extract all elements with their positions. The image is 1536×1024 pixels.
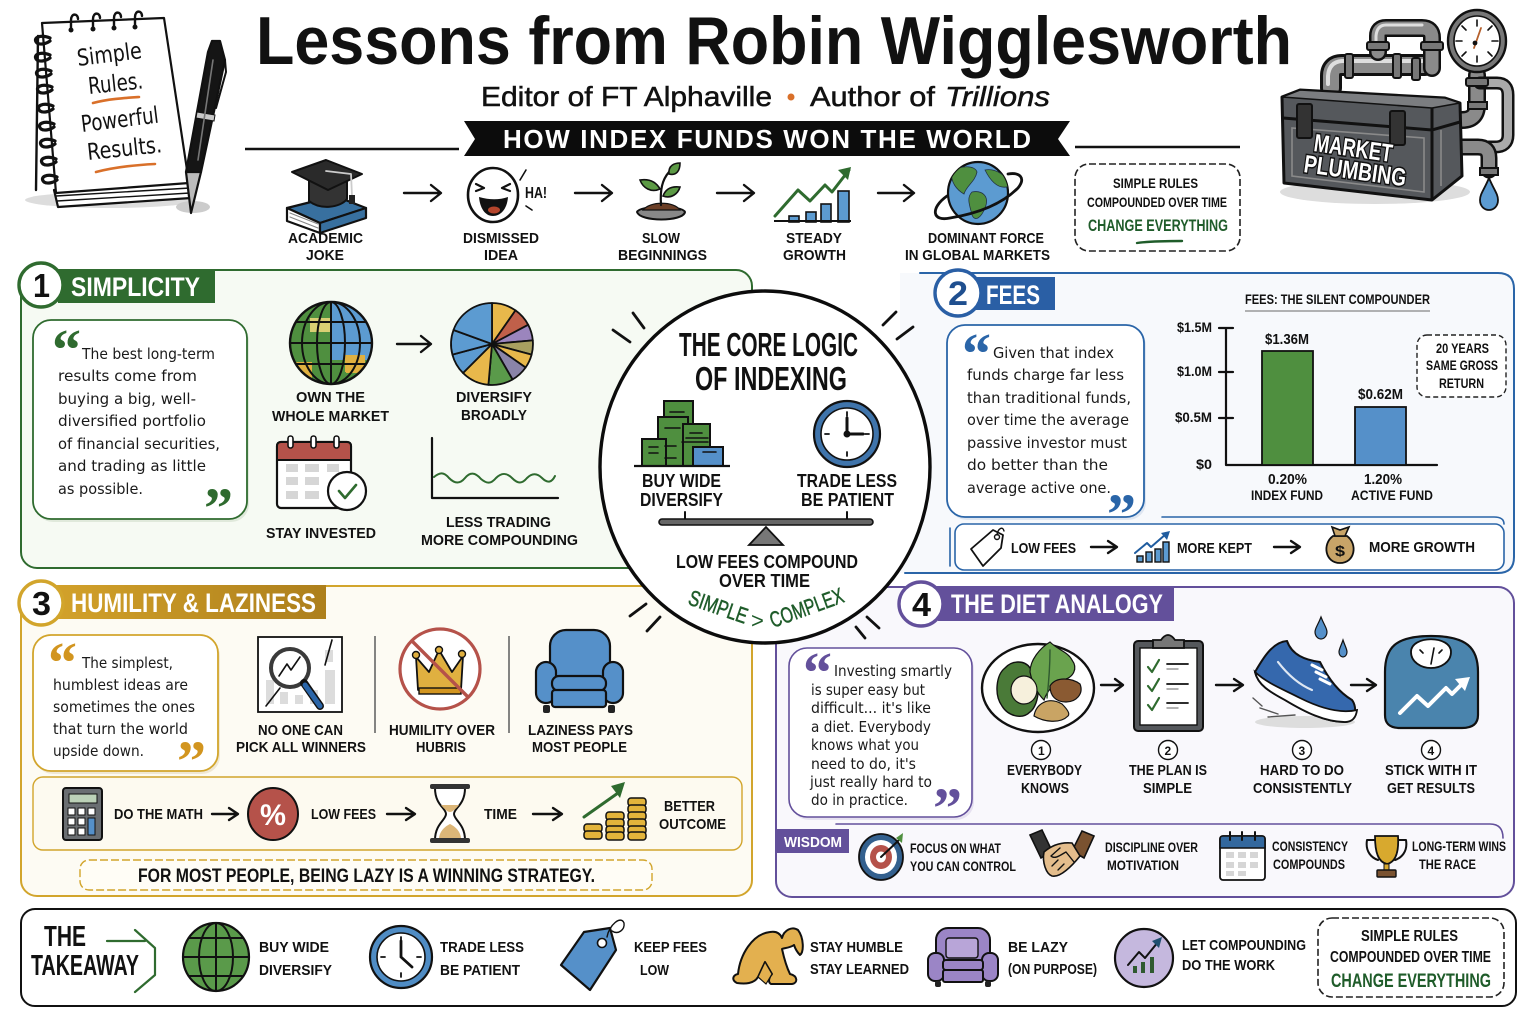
icon: magnifier over stocks: PICK ALL WINNERS	[236, 739, 366, 756]
tag: wisdom	[776, 829, 849, 853]
bar: index fund: INDEX FUND	[1251, 487, 1323, 503]
step: dismissed idea: IDEA	[484, 247, 518, 264]
wisdom: discipline: MOTIVATION	[1107, 858, 1179, 873]
item: let compounding	[1115, 929, 1306, 987]
subtitle: Editor of FT Alphaville	[481, 81, 772, 112]
panel: the takeaway	[21, 909, 1516, 1006]
icon: magnifier over stocks	[236, 637, 366, 756]
icon: hourglass	[430, 784, 470, 843]
step: slow beginnings: BEGINNINGS	[618, 247, 707, 264]
text: low fees compound	[676, 552, 858, 591]
labels: buy wide and trade less: BE PATIENT	[801, 490, 894, 510]
quote card: ”	[204, 476, 233, 541]
toolbox text: PLUMBING	[1302, 150, 1408, 192]
heading: fees: FEES	[986, 280, 1040, 310]
icon: diversify pie: DIVERSIFY	[456, 389, 532, 406]
quote card: upside down.	[53, 742, 144, 760]
quote card: as possible.	[58, 480, 143, 498]
chart: less trading more compounding: LESS TRADING	[446, 514, 551, 531]
takeaway heading	[31, 921, 155, 992]
icon: growth chart	[1135, 531, 1170, 562]
step 3: hard to do consistently: CONSISTENTLY	[1253, 780, 1352, 797]
callout: lazy strategy	[80, 860, 652, 890]
quote card: ”	[933, 776, 962, 841]
step 2: the plan is simple: 2	[1164, 744, 1172, 758]
callout: simple rules: CHANGE EVERYTHING	[1088, 216, 1228, 235]
quote card: “	[962, 321, 991, 386]
quote card: diversified portfolio	[58, 412, 206, 430]
title: Lessons from Robin Wigglesworth	[256, 3, 1292, 79]
step: dominant force: DOMINANT FORCE	[928, 230, 1044, 247]
quote card: average active one.	[967, 479, 1111, 497]
banner ribbon: HOW INDEX FUNDS WON THE WORLD	[503, 124, 1031, 154]
icon: calculator	[63, 788, 102, 840]
quote card: Investing smartly	[834, 662, 952, 680]
step: academic joke	[287, 160, 366, 264]
quote card: buying a big, well-	[58, 390, 196, 408]
wisdom: discipline: DISCIPLINE OVER	[1105, 840, 1198, 855]
step: academic joke: JOKE	[306, 247, 344, 264]
quote card: a diet. Everybody	[811, 718, 931, 736]
center title: OF INDEXING	[695, 360, 847, 397]
wisdom: focus: YOU CAN CONTROL	[910, 859, 1016, 874]
heading: humility and laziness: HUMILITY & LAZINESS	[71, 588, 316, 618]
quote card: humblest ideas are	[53, 676, 188, 694]
center title	[679, 326, 858, 397]
callout: simple rules: COMPOUNDED OVER TIME	[1330, 949, 1491, 966]
step 1: everybody knows: 1	[1038, 744, 1045, 758]
item: buy wide: DIVERSIFY	[259, 962, 332, 979]
flow: low fees to more growth: LOW FEES	[1011, 540, 1076, 557]
quote card: do in practice.	[811, 791, 908, 809]
text: simple beats complex: >	[751, 608, 764, 633]
quote card: knows what you	[811, 736, 919, 754]
item: stay humble: STAY HUMBLE	[810, 939, 903, 956]
step 2: the plan is simple: THE PLAN IS	[1129, 762, 1207, 779]
wisdom: consistency: CONSISTENCY	[1272, 839, 1348, 854]
item: stay humble: STAY LEARNED	[810, 961, 909, 978]
chart title: FEES: THE SILENT COMPOUNDER	[1245, 291, 1430, 307]
icon: coin stacks	[584, 782, 646, 840]
quote card: Given that index	[993, 344, 1114, 362]
quote card	[789, 640, 974, 841]
bar: active fund	[1351, 386, 1433, 503]
bar: active fund: 1.20%	[1364, 471, 1402, 488]
labels: buy wide and trade less	[640, 471, 897, 510]
icon: blue armchair	[528, 630, 633, 756]
heading: the diet analogy: THE DIET ANALOGY	[951, 589, 1163, 619]
chart: fees the silent compounder: $1.0M	[1177, 363, 1212, 379]
icon: clock	[814, 401, 880, 467]
quote card: just really hard to	[809, 773, 932, 791]
icon: magnifier over stocks: NO ONE CAN	[258, 722, 343, 739]
illustration: notebook	[25, 12, 195, 208]
illustration: pen	[176, 41, 226, 213]
text: low fees compound: LOW FEES COMPOUND	[676, 552, 858, 572]
icon: stay invested calendar: STAY INVESTED	[266, 525, 376, 542]
quote card: need to do, it's	[811, 755, 916, 773]
item: buy wide	[182, 922, 332, 992]
quote card: “	[52, 317, 81, 382]
icon: diversify pie: BROADLY	[461, 407, 527, 424]
text: low fees compound: OVER TIME	[719, 571, 810, 591]
wisdom: consistency: COMPOUNDS	[1273, 857, 1345, 872]
callout: simple rules: CHANGE EVERYTHING	[1331, 971, 1491, 992]
wisdom: focus	[859, 833, 1016, 880]
text: simple beats complex	[685, 583, 847, 633]
note text	[76, 38, 163, 166]
note text: Results.	[86, 132, 163, 166]
quote card: results come from	[58, 367, 197, 385]
step 3: hard to do consistently: HARD TO DO	[1260, 762, 1344, 779]
bar: index fund: 0.20%	[1268, 471, 1307, 488]
heading: humility and laziness	[19, 581, 326, 625]
step: dismissed idea	[463, 168, 547, 264]
chart: fees the silent compounder: $0	[1196, 456, 1212, 472]
panel 3: humility and laziness	[19, 581, 752, 896]
labels: buy wide and trade less: TRADE LESS	[797, 471, 897, 491]
flow: do the math: OUTCOME	[659, 816, 726, 833]
item: stay humble	[733, 928, 909, 984]
quote card: difficult... it's like	[811, 699, 931, 717]
step 4: stick with it	[1385, 636, 1478, 797]
quote card: is super easy but	[811, 681, 925, 699]
icon: money bag	[1326, 527, 1354, 563]
wisdom: long term: LONG-TERM WINS	[1412, 839, 1506, 854]
heading: the diet analogy	[899, 582, 1174, 626]
step 2: the plan is simple	[1129, 635, 1207, 797]
note text: Rules.	[87, 68, 144, 100]
quote card: and trading as little	[58, 457, 206, 475]
step 3: hard to do consistently: 3	[1298, 744, 1306, 758]
note text: Simple	[76, 38, 143, 72]
item: keep fees low: KEEP FEES	[634, 939, 707, 956]
center circle: the core logic of indexing	[600, 291, 930, 643]
icon: crossed out crown: HUMILITY OVER	[389, 722, 495, 739]
step: slow beginnings: SLOW	[642, 230, 681, 247]
panel 1: simplicity	[19, 263, 752, 568]
step: academic joke: ACADEMIC	[288, 230, 363, 247]
step 4: stick with it: STICK WITH IT	[1385, 762, 1477, 779]
flow: do the math: TIME	[484, 806, 517, 823]
toolbox text: MARKET	[1312, 129, 1394, 168]
takeaway heading: TAKEAWAY	[31, 950, 139, 982]
subtitle	[481, 81, 1050, 112]
step: dominant force: IN GLOBAL MARKETS	[905, 247, 1050, 264]
item: keep fees low	[561, 920, 707, 990]
icon: own the whole market	[272, 300, 389, 425]
quote card: The simplest,	[81, 654, 173, 672]
item: keep fees low: LOW	[640, 962, 670, 979]
icon: diversify pie	[451, 303, 533, 424]
quote card: ”	[1107, 482, 1136, 547]
wisdom: long term	[1367, 836, 1506, 877]
icon: green buildings	[634, 401, 730, 466]
item: let compounding: LET COMPOUNDING	[1182, 937, 1306, 954]
tag: wisdom: WISDOM	[784, 834, 842, 851]
bar: active fund: $0.62M	[1358, 386, 1403, 403]
callout: simple rules	[1318, 918, 1504, 997]
item: be lazy: BE LAZY	[1008, 939, 1068, 956]
labels: buy wide and trade less: BUY WIDE	[642, 471, 721, 491]
text: simple beats complex: SIMPLE	[685, 585, 751, 629]
step 1: everybody knows	[982, 642, 1094, 797]
callout: simple rules: SIMPLE RULES	[1113, 175, 1198, 191]
flow: do the math: LOW FEES	[311, 806, 376, 823]
flow: do the math: DO THE MATH	[114, 806, 203, 823]
heading: simplicity: 1	[33, 267, 50, 304]
heading: the diet analogy: 4	[912, 586, 932, 623]
panel 2: fees	[900, 270, 1514, 573]
icon: percent badge	[248, 788, 298, 840]
icon: balance scale	[659, 512, 873, 545]
wisdom: consistency	[1220, 832, 1348, 880]
chart: fees the silent compounder: $0.5M	[1175, 409, 1212, 425]
flow: low fees to more growth: MORE KEPT	[1177, 540, 1252, 557]
icon: crossed out crown: HUBRIS	[416, 739, 466, 756]
flow: do the math: BETTER	[664, 798, 715, 815]
note text: Powerful	[80, 103, 160, 138]
quote card: of financial securities,	[58, 435, 220, 453]
wisdom: long term: THE RACE	[1419, 857, 1476, 872]
step 2: the plan is simple: SIMPLE	[1143, 780, 1192, 797]
step 4: stick with it: 4	[1428, 744, 1434, 758]
step 1: everybody knows: KNOWS	[1021, 780, 1069, 797]
icon: blue armchair: LAZINESS PAYS	[528, 722, 633, 739]
note: 20 years: SAME GROSS	[1426, 358, 1498, 373]
heading: fees: 2	[948, 275, 968, 313]
item: trade less	[370, 926, 524, 988]
icon: stay invested calendar	[266, 436, 376, 542]
note: 20 years	[1417, 335, 1506, 397]
flow: low fees to more growth: MORE GROWTH	[1369, 539, 1475, 556]
chart: less trading more compounding: MORE COMPOUNDING	[421, 532, 578, 549]
icon: percent badge: %	[260, 799, 286, 832]
icon: money bag: $	[1335, 543, 1346, 560]
quote card	[33, 630, 220, 794]
icon: own the whole market: OWN THE	[296, 389, 365, 406]
bar: index fund	[1251, 331, 1323, 503]
step: steady growth: GROWTH	[783, 247, 846, 264]
flow: low fees to more growth	[955, 524, 1504, 570]
quote card: than traditional funds,	[967, 389, 1131, 407]
item: trade less: TRADE LESS	[440, 939, 524, 956]
quote card: do better than the	[967, 456, 1108, 474]
heading: simplicity: SIMPLICITY	[71, 272, 200, 302]
icon: crossed out crown	[389, 629, 495, 756]
step: dismissed idea: DISMISSED	[463, 230, 539, 247]
step 3: hard to do consistently	[1253, 617, 1357, 797]
quote card: ”	[177, 729, 206, 794]
timeline: how index funds won	[287, 160, 1050, 264]
bar: active fund: ACTIVE FUND	[1351, 487, 1433, 503]
step: steady growth: STEADY	[786, 230, 842, 247]
item: buy wide: BUY WIDE	[259, 939, 329, 956]
step: dismissed idea: HA!	[525, 185, 547, 202]
item: be lazy	[928, 928, 1097, 987]
wisdom: focus: FOCUS ON WHAT	[910, 841, 1002, 856]
step: dominant force	[905, 162, 1050, 264]
text: simple beats complex: COMPLEX	[766, 583, 847, 633]
quote card: funds charge far less	[967, 366, 1124, 384]
icon: blue armchair: MOST PEOPLE	[532, 739, 627, 756]
callout: simple rules	[1075, 164, 1240, 251]
heading: humility and laziness: 3	[32, 585, 51, 622]
chart: less trading more compounding	[421, 438, 578, 549]
subtitle: Author of	[810, 81, 935, 112]
item: trade less: BE PATIENT	[440, 962, 520, 979]
subtitle: Trillions	[945, 81, 1050, 112]
labels: buy wide and trade less: DIVERSIFY	[640, 490, 723, 510]
quote card: The best long-term	[81, 345, 215, 363]
icon: own the whole market: WHOLE MARKET	[272, 408, 389, 425]
quote card: “	[803, 640, 832, 705]
wisdom: discipline	[1030, 830, 1198, 876]
callout: simple rules: SIMPLE RULES	[1361, 928, 1458, 945]
panel 4: the diet analogy	[776, 582, 1514, 897]
quote card: “	[48, 630, 77, 695]
center title: THE CORE LOGIC	[679, 326, 858, 363]
quote card: over time the average	[967, 411, 1129, 429]
illustration: market plumbing toolbox	[1280, 10, 1508, 210]
toolbox text	[1302, 129, 1408, 192]
step 4: stick with it: GET RESULTS	[1387, 780, 1475, 797]
quote card	[947, 321, 1146, 547]
item: let compounding: DO THE WORK	[1182, 957, 1275, 974]
step: steady growth	[774, 167, 851, 264]
item: be lazy: (ON PURPOSE)	[1008, 961, 1097, 978]
callout: lazy strategy: FOR MOST PEOPLE, BEING LAZY IS A WINNING STRATEGY.	[138, 866, 595, 887]
icon: price tag	[971, 528, 1004, 566]
chart: fees the silent compounder	[1175, 291, 1506, 503]
quote card: that turn the world	[53, 720, 188, 738]
quote card: sometimes the ones	[53, 698, 195, 716]
heading: fees	[935, 270, 1055, 316]
heading: simplicity	[19, 263, 215, 307]
step: slow beginnings	[618, 163, 707, 264]
bar: index fund: $1.36M	[1265, 331, 1309, 348]
step 1: everybody knows: EVERYBODY	[1007, 762, 1082, 779]
note: 20 years: RETURN	[1439, 376, 1484, 391]
chart: fees the silent compounder: $1.5M	[1177, 319, 1212, 335]
callout: simple rules: COMPOUNDED OVER TIME	[1087, 194, 1227, 210]
takeaway heading: THE	[44, 921, 86, 953]
quote card	[33, 317, 249, 541]
note: 20 years: 20 YEARS	[1436, 341, 1489, 356]
flow: do the math	[33, 777, 742, 850]
quote card: passive investor must	[967, 434, 1127, 452]
